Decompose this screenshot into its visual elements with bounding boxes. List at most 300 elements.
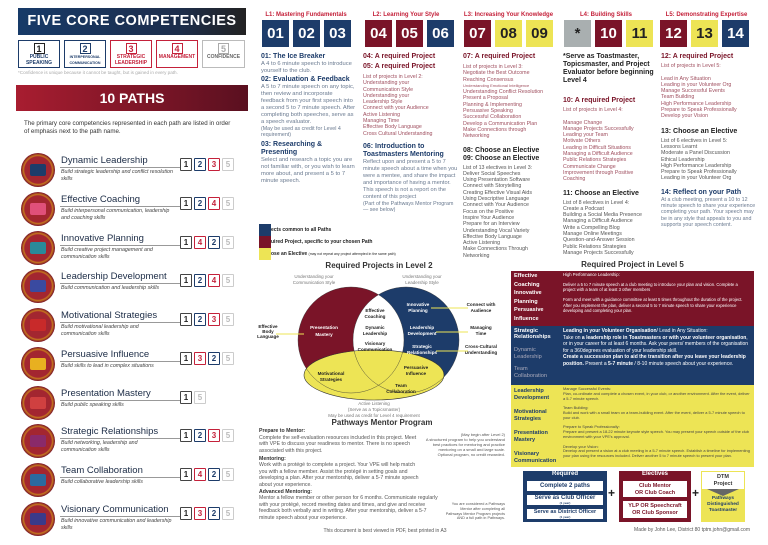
box: DTM: Pathways bbox=[712, 496, 734, 501]
box: electives: Electives bbox=[642, 471, 668, 477]
heading: required project in level 5: Required Project in Level 5 bbox=[581, 260, 684, 269]
mentor program: A structured program to help you understand best practices for mentoring and practice mentoring on a small and large scale. Optional program, no credit rewarded. bbox=[426, 437, 505, 457]
column: level 2: Cross Cultural Understanding bbox=[363, 131, 432, 137]
column: level 5: 13: Choose an Elective bbox=[661, 128, 737, 135]
path list: 1 bbox=[184, 160, 188, 169]
column: level 1: A 4 to 6 minute speech to introduce yourself to the club. bbox=[261, 61, 352, 74]
venn diagram: required projects in level 2: Cross-Cultural bbox=[465, 344, 497, 349]
column: level 3: Develop a Communication Plan bbox=[463, 121, 537, 127]
table: level 5: Persuasive bbox=[514, 307, 544, 313]
column: level 4: Create a Podcast bbox=[563, 206, 604, 212]
column: level 3: Effective Body Language bbox=[463, 234, 522, 240]
venn diagram: required projects in level 2: Visionary bbox=[365, 341, 386, 346]
column: level 3: Deliver Social Speeches bbox=[463, 171, 520, 177]
column: level 5: List of projects in Level 5: bbox=[661, 63, 721, 69]
column: level 5: Leading in your Volunteer Org bbox=[661, 82, 731, 88]
intro text: The primary core competencies represented in each path are listed in order of emphasis next to the path name. bbox=[24, 120, 230, 134]
column: level 3: Active Listening bbox=[463, 240, 500, 246]
table: level 5: Deliver a 5 to 7 minute speech at a club meeting to introduce your plan and vision. Complete a project with a team of at least 3 other members bbox=[563, 282, 738, 292]
path list: Build public speaking skills bbox=[61, 402, 124, 408]
column: level 1: 01: The Ice Breaker bbox=[261, 53, 325, 60]
level headers and number boxes: 07 bbox=[469, 25, 486, 42]
venn diagram: required projects in level 2: Team bbox=[395, 383, 407, 388]
column: level 4: Leading in Difficult Situations bbox=[563, 145, 631, 151]
column: level 3: Connect with Your Audience bbox=[463, 202, 529, 208]
column: level 3: Connect with Storytelling bbox=[463, 183, 521, 189]
path list: Leadership Development bbox=[61, 271, 167, 282]
box: required: Serve as Club Officer bbox=[535, 495, 595, 501]
column: level 2: 05: A required Project bbox=[363, 63, 435, 70]
text: Plan, co-ordinate and complete a chosen event, in your club, or another environment. After the event, deliver a 5-7 minute speech. bbox=[563, 391, 750, 401]
venn diagram: required projects in level 2: Dynamic bbox=[365, 325, 385, 330]
text: Strategic bbox=[514, 328, 538, 334]
column: level 1: 02: Evaluation & Feedback bbox=[261, 76, 350, 83]
column: level 5: Ethical Leadership bbox=[661, 157, 705, 163]
venn diagram: required projects in level 2: Leadership bbox=[363, 331, 387, 336]
column: level 5: High Performance Leadership bbox=[661, 163, 731, 169]
competency boxes: MANAGEMENT bbox=[159, 54, 195, 60]
competency boxes: 4 bbox=[174, 44, 180, 54]
level headers and number boxes: 14 bbox=[727, 25, 744, 42]
competency boxes: CONFIDENCE bbox=[207, 54, 240, 60]
column: level 2: (Part of the Pathways Mentor Program — see below) bbox=[363, 201, 453, 213]
box: DTM: Project bbox=[714, 480, 732, 486]
path list: 3 bbox=[212, 160, 216, 169]
column: level 5: Lessons Learnt bbox=[661, 144, 697, 150]
column: level 3: Planning & Implementing bbox=[463, 102, 522, 108]
column: level 2: Leadership Style bbox=[363, 99, 402, 105]
column: level 2: Effective Body Language bbox=[363, 124, 422, 130]
column: level 4: Leading your Team bbox=[563, 132, 608, 138]
venn diagram: required projects in level 2: Mastery bbox=[315, 332, 333, 337]
column: level 3: Successful Collaboration bbox=[463, 114, 521, 120]
column: level 3: Negotiate the Best Outcome bbox=[463, 70, 530, 76]
competency boxes: PUBLIC bbox=[30, 54, 48, 60]
column: level 2: Active Listening bbox=[363, 112, 400, 118]
text: Dynamic bbox=[514, 347, 536, 353]
venn diagram: required projects in level 2: Understanding your bbox=[294, 274, 334, 279]
path list: 3 bbox=[212, 315, 216, 324]
path list: Build motivational leadership and communication skills bbox=[61, 324, 139, 337]
venn diagram: required projects in level 2: Required Projects in Level 2 bbox=[325, 261, 433, 270]
venn diagram: required projects in level 2: (Serve as a Topicsmaster) bbox=[348, 407, 401, 412]
level headers and number boxes: * bbox=[575, 25, 580, 42]
column: level 3: Inspire Your Audience bbox=[463, 215, 514, 221]
column: level 2: Connect with your Audience bbox=[363, 105, 429, 111]
column: level 3: Make Connections through bbox=[463, 127, 526, 133]
level headers and number boxes: 05 bbox=[401, 25, 418, 42]
path list: Team Collaboration bbox=[61, 465, 143, 476]
text: Visionary bbox=[514, 451, 539, 457]
path list: 5 bbox=[226, 199, 230, 208]
box: required: (1 year) bbox=[560, 515, 570, 519]
path list: Build communication and leadership skills bbox=[61, 285, 159, 291]
column: level 5: Leading in your Volunteer Org bbox=[661, 175, 731, 181]
competency boxes: 3 bbox=[128, 44, 134, 54]
competency boxes: 5 bbox=[221, 44, 226, 54]
legend: ose an Elective (may not repeat any project attempted in the same path) bbox=[271, 251, 396, 257]
column: level 4: Managing a Difficult Audience bbox=[563, 218, 633, 224]
mentor program: You are considered a Pathways Mentor after completing all Pathways Mentor Program projects AND a full path in Pathways. bbox=[446, 502, 505, 520]
path list: 4 bbox=[198, 238, 202, 247]
column: level 1: A 5 to 7 minute speech on any topic, then review and incorporate feedback from your first speech into a second 5 to 7 minute speech. After completing both speeches, serve as a speech evaluator. bbox=[261, 84, 355, 125]
path list: 5 bbox=[226, 160, 230, 169]
column: level 2: Communication Style bbox=[363, 87, 413, 93]
level headers and number boxes: 09 bbox=[531, 25, 548, 42]
text: Develop your Vision: bbox=[563, 444, 599, 449]
competency boxes: INTERPERSONAL bbox=[70, 55, 100, 59]
column: level 4: Improvement through Positive bbox=[563, 170, 633, 176]
level headers and number boxes: L4: Building Skills bbox=[580, 12, 632, 18]
column: level 2: Managing Time bbox=[363, 118, 399, 124]
path list: Build innovative communication and leadership skills bbox=[61, 518, 171, 531]
column: level 3: Understanding Vocal Variety bbox=[463, 228, 529, 234]
legend: uired Project, specific to your chosen Path bbox=[271, 239, 372, 245]
mentor program bbox=[259, 418, 505, 521]
venn diagram: required projects in level 2: Effective bbox=[258, 324, 278, 329]
box: DTM bbox=[701, 471, 745, 522]
column: level 4: 11: Choose an Elective bbox=[563, 190, 639, 197]
path list: 1 bbox=[184, 354, 188, 363]
path list: 4 bbox=[212, 199, 216, 208]
level headers and number boxes: L1: Mastering Fundamentals bbox=[265, 12, 347, 18]
text: Team Building: bbox=[563, 405, 589, 410]
table: level 5: Innovative bbox=[514, 290, 542, 296]
venn diagram: required projects in level 2: Persuasive bbox=[404, 365, 429, 370]
legend bbox=[259, 224, 396, 260]
column: level 3: Persuasive Speaking bbox=[463, 108, 513, 114]
mentor program: Pathways Mentor Program bbox=[332, 418, 432, 427]
path list: 4 bbox=[198, 470, 202, 479]
path list: 2 bbox=[198, 315, 202, 324]
path list: 1 bbox=[184, 238, 188, 247]
path list: Strategic Relationships bbox=[61, 426, 158, 437]
text: Leadership bbox=[514, 388, 544, 394]
path list: Presentation Mastery bbox=[61, 388, 151, 399]
column: level 4: List of 8 electives in Level 4: bbox=[563, 200, 629, 206]
path list: 2 bbox=[198, 160, 202, 169]
path list: 5 bbox=[226, 238, 230, 247]
table: level 5: Effective bbox=[514, 273, 537, 279]
column: level 3: Understanding Emotional Intelligence bbox=[463, 83, 529, 88]
box: electives: OR Club Coach bbox=[635, 490, 675, 496]
path list: Visionary Communication bbox=[61, 504, 169, 515]
column: level 3 bbox=[463, 52, 543, 259]
competency boxes: LEADERSHIP bbox=[115, 60, 147, 66]
text: Team bbox=[514, 366, 528, 372]
path list: 1 bbox=[184, 509, 188, 518]
column: level 3: Make Connections Through bbox=[463, 246, 528, 252]
column: level 4 bbox=[563, 53, 654, 256]
column: level 5: Manage Successful Events bbox=[661, 88, 725, 94]
path list: Build creative project management and communication skills bbox=[61, 247, 153, 260]
path list: 5 bbox=[226, 315, 230, 324]
column: level 2 bbox=[363, 52, 457, 213]
column: level 4: Motivate Others bbox=[563, 138, 600, 144]
path list: Innovative Planning bbox=[61, 233, 144, 244]
path list: 3 bbox=[198, 509, 202, 518]
mentor program: (May begin after Level 2) bbox=[461, 432, 505, 437]
column: level 4: Building a Social Media Presence bbox=[563, 212, 642, 218]
venn diagram: required projects in level 2: Coaching bbox=[365, 314, 386, 319]
path list: Build interpersonal communication, leadership and coaching skills bbox=[61, 208, 169, 221]
level headers and number boxes: 04 bbox=[370, 25, 387, 42]
level headers and number boxes: 12 bbox=[665, 25, 682, 42]
title: five core competencies bbox=[18, 8, 246, 35]
mentor program: Advanced Mentoring: bbox=[259, 489, 312, 495]
venn diagram: required projects in level 2: Innovative bbox=[407, 302, 430, 307]
column: level 1: 03: Researching & Presenting bbox=[261, 141, 322, 156]
venn diagram: required projects in level 2: Time bbox=[476, 331, 487, 336]
path list: Persuasive Influence bbox=[61, 349, 149, 360]
column: level 4: Public Relations Strategies bbox=[563, 244, 626, 250]
column: level 5: Develop your Vision bbox=[661, 113, 708, 119]
box: electives: Club Mentor bbox=[639, 483, 671, 489]
column: level 4: Question-and-Answer Session bbox=[563, 237, 635, 243]
path list: 1 bbox=[184, 393, 188, 402]
column: level 5: Lead in Any Situation bbox=[661, 76, 711, 82]
mentor program: Work with a protégé to complete a project. Your VPE will help match you with a fellow member. Assist the protégé in setting goals and developing a plan. After your mentorship, deliver a 5-7 minute speech about your experience. bbox=[259, 462, 418, 488]
column: level 3: List of 13 electives in Level 3: bbox=[463, 165, 532, 171]
venn diagram: required projects in level 2: Body bbox=[262, 329, 274, 334]
column: level 4: Managing a Difficult Audience bbox=[563, 151, 633, 157]
competency boxes: STRATEGIC bbox=[117, 54, 145, 60]
venn diagram: required projects in level 2: May be used as credit for Level 4 requirement bbox=[328, 413, 421, 418]
venn diagram: required projects in level 2: Influence bbox=[406, 371, 427, 376]
column: level 4: Manage Projects Successfully bbox=[563, 126, 634, 132]
venn diagram: required projects in level 2: Language bbox=[257, 334, 279, 339]
column: level 1: Select and research a topic you are not familiar with, or you wish to learn more about, and present a 5 to 7 minute speech. bbox=[261, 157, 355, 184]
venn diagram: required projects in level 2: Connect with bbox=[467, 302, 496, 307]
path list: 1 bbox=[184, 276, 188, 285]
competency boxes: *Confidence is unique because it cannot be taught, but is gained in every path. bbox=[18, 70, 178, 75]
column: level 3: 07: A required Project bbox=[463, 53, 535, 60]
text: Communication bbox=[514, 458, 556, 464]
path list: Motivational Strategies bbox=[61, 310, 157, 321]
box: DTM: Toastmaster bbox=[709, 508, 737, 513]
heading: 10 paths bbox=[16, 85, 248, 111]
mentor program: Mentor a fellow member or other person for 6 months. Communicate regularly with your protégé, record meeting dates and times, and give and receive feedback both verbally and in writing. After your mentorship, deliver a 5-7 minute speech about your experience. bbox=[259, 495, 438, 521]
level headers and number boxes bbox=[262, 12, 749, 47]
path list: 4 bbox=[212, 276, 216, 285]
venn diagram: required projects in level 2: Effective bbox=[365, 308, 385, 313]
table: level 5: Coaching bbox=[514, 282, 539, 288]
column: level 4: Manage Change bbox=[563, 120, 602, 126]
competency boxes bbox=[18, 40, 245, 75]
path list: 1 bbox=[184, 431, 188, 440]
venn diagram: required projects in level 2: Development bbox=[408, 331, 437, 336]
column: level 5: At a club meeting, present a 10 to 12 minute speech to share your experience completing your path. Your speech may be in any style that appeals to you and supports your speech content. bbox=[661, 197, 755, 228]
box: required: Complete 2 paths bbox=[540, 483, 590, 489]
competency boxes: SPEAKING bbox=[26, 60, 52, 66]
column: level 3: Networking bbox=[463, 133, 490, 139]
level headers and number boxes: 08 bbox=[500, 25, 517, 42]
column: level 4: Communicate Change bbox=[563, 164, 616, 170]
table: level 5: Influence bbox=[514, 316, 539, 322]
box: electives bbox=[619, 471, 691, 522]
text: Build and work with a small team on a team-building event. After the event, deliver a 5-7 minute speech to your club. bbox=[563, 410, 745, 420]
column: level 5: Team Building bbox=[661, 94, 694, 100]
venn diagram: required projects in level 2 bbox=[257, 261, 497, 418]
text: Leadership bbox=[514, 354, 542, 360]
venn diagram: required projects in level 2: Relationships bbox=[407, 350, 438, 355]
venn diagram: required projects in level 2: Presentation bbox=[310, 325, 338, 330]
mentor program: Complete the self-evaluation resources included in this project. Meet with VPE to discuss your readiness to mentor. There is no speech associated with this project. bbox=[259, 435, 416, 454]
text: Take on a leadership role in Toastmasters or with your volunteer organisation, or in your career for at least 6 months. Ask your peers/ members of the organisation for a 360degrees evaluation of your leadership skill. bbox=[563, 335, 748, 354]
text: Prepare to Speak Professionally: bbox=[563, 424, 620, 429]
column: level 1 bbox=[261, 52, 355, 184]
column: level 5 bbox=[661, 52, 755, 228]
path list: 5 bbox=[226, 509, 230, 518]
column: level 4: *Serve as Toastmaster, Topicsmaster, and Project Evaluator before beginning Level 4 bbox=[563, 53, 654, 84]
box: required: Required bbox=[552, 471, 578, 477]
column: level 3: Using Presentation Software bbox=[463, 177, 530, 183]
path list: 2 bbox=[212, 238, 216, 247]
column: level 4: List of projects in Level 4: bbox=[563, 107, 623, 113]
level headers and number boxes: L5: Demonstrating Expertise bbox=[666, 12, 747, 18]
column: level 2: Understanding your bbox=[363, 93, 409, 99]
column: level 5: 14: Reflect on your Path bbox=[661, 189, 741, 196]
path list: Dynamic Leadership bbox=[61, 155, 148, 166]
venn diagram: required projects in level 2: Managing bbox=[470, 325, 492, 330]
path list: 1 bbox=[184, 199, 188, 208]
competency boxes: COMMUNICATION bbox=[69, 60, 101, 64]
column: level 3: Present a Proposal bbox=[463, 95, 508, 101]
path list: Effective Coaching bbox=[61, 194, 140, 205]
path list: 5 bbox=[226, 431, 230, 440]
level headers and number boxes: 03 bbox=[329, 25, 346, 42]
venn diagram: required projects in level 2: Communication Style bbox=[293, 280, 336, 285]
column: level 2: Reflect upon and present a 5 to 7 minute speech about a time when you were a mentee, and share the impact and importance of having a mentor. This speech is not a report on the content of this project bbox=[363, 159, 457, 200]
path list: 2 bbox=[198, 199, 202, 208]
column: level 4: Manage Projects Successfully bbox=[563, 250, 634, 256]
column: level 3: Reaching Consensus bbox=[463, 77, 513, 83]
text: Create a succession plan to aid the transition after you leave your leadership position. Present a 5-7 minute / 8-10 minute speech about your experience. bbox=[563, 354, 746, 367]
column: level 1: (May be used as credit for Level 4 requirement) bbox=[261, 126, 341, 138]
level headers and number boxes: 11 bbox=[632, 25, 647, 42]
box: DTM: DTM bbox=[717, 474, 729, 480]
box: DTM: Distinguished bbox=[707, 502, 739, 507]
column: level 3: List of projects in Level 3: bbox=[463, 64, 523, 70]
text: Leading in your Volunteer Organisation/ Lead in Any Situation: bbox=[563, 328, 708, 334]
box: electives: YLP OR Speechcraft bbox=[628, 503, 682, 509]
column: level 4: Manage Online Meetings bbox=[563, 231, 622, 237]
path list: 5 bbox=[226, 276, 230, 285]
table: level 5: Form and meet with a guidance committee at least 5 times throughout the duration of the project. After you implement the plan, deliver a second 5 to 7 minute speech to share your experience developing and completing your plan. bbox=[563, 297, 742, 313]
path list: 2 bbox=[198, 276, 202, 285]
column: level 3: Focus on the Positive bbox=[463, 209, 514, 215]
column: level 4: Public Relations Strategies bbox=[563, 157, 626, 163]
mentor program: Prepare to Mentor: bbox=[259, 428, 305, 434]
venn diagram: required projects in level 2: Motivational bbox=[318, 371, 344, 376]
venn diagram: required projects in level 2: Leadership Style bbox=[405, 280, 439, 285]
column: level 5: High Performance Leadership bbox=[661, 101, 731, 107]
column: level 3: Understanding Conflict Resolution bbox=[463, 89, 543, 95]
text: Motivational bbox=[514, 409, 547, 415]
venn diagram: required projects in level 2: Collaboration bbox=[386, 389, 416, 394]
text: Develop and present a vision at a club meeting in a 5-7 minute speech. Establish a timeline for implementing your plan using the resources included. Deliver another 5 to 7 minute speech to present your plan. bbox=[563, 448, 750, 458]
path list: 2 bbox=[212, 509, 216, 518]
path list: 2 bbox=[198, 431, 202, 440]
path list: 2 bbox=[212, 354, 216, 363]
path list: 5 bbox=[198, 393, 202, 402]
venn diagram: required projects in level 2: Strategic bbox=[412, 344, 432, 349]
text: Manage Successful Events: bbox=[563, 386, 611, 391]
level headers and number boxes: 01 bbox=[267, 25, 284, 42]
column: level 4: Coaching bbox=[563, 176, 585, 182]
text: Mastery bbox=[514, 437, 535, 443]
table: level 5: Planning bbox=[514, 299, 538, 305]
column: level 3: Prepare for an Interview bbox=[463, 221, 520, 227]
path list: 2 bbox=[212, 470, 216, 479]
venn diagram: required projects in level 2: Audience bbox=[471, 308, 492, 313]
level headers and number boxes: L2: Learning Your Style bbox=[373, 12, 439, 18]
table: level 5 bbox=[511, 271, 754, 326]
level headers and number boxes: 13 bbox=[696, 25, 713, 42]
path list: Build skills to lead in complex situations bbox=[61, 363, 154, 369]
box: required: (1 year) bbox=[560, 501, 570, 505]
plus: + bbox=[692, 486, 699, 500]
path list: 3 bbox=[212, 431, 216, 440]
path list: 1 bbox=[184, 315, 188, 324]
venn diagram: required projects in level 2: Understanding bbox=[465, 350, 497, 355]
column: level 2: 04: A required Project bbox=[363, 53, 435, 60]
path list: Build collaborative leadership skills bbox=[61, 479, 143, 485]
column: level 3: Creating Effective Visual Aids bbox=[463, 190, 532, 196]
column: level 5: Prepare to Speak Professionally bbox=[661, 107, 737, 113]
title: five core competencies: FIVE CORE COMPETENCIES bbox=[27, 13, 237, 29]
venn diagram: required projects in level 2: Active Listening bbox=[358, 401, 390, 406]
text: Presentation bbox=[514, 430, 548, 436]
level headers and number boxes: 02 bbox=[298, 25, 315, 42]
path list: 5 bbox=[226, 354, 230, 363]
column: level 5: 12: A required Project bbox=[661, 53, 733, 60]
footer note: This document is best viewed in PDF, best printed in A3 bbox=[323, 528, 447, 534]
column: level 5: Prepare to Speak Professionally bbox=[661, 169, 737, 175]
text: Development bbox=[514, 395, 549, 401]
column: level 4: 10: A required Project bbox=[563, 97, 635, 104]
legend: ects common to all Paths bbox=[271, 227, 331, 233]
heading: 10 paths: 10 PATHS bbox=[100, 90, 164, 106]
box: electives: OR Club Sponsor bbox=[632, 510, 678, 516]
text: Relationships bbox=[514, 334, 551, 340]
text: Strategies bbox=[514, 416, 541, 422]
column: level 3: Networking bbox=[463, 253, 490, 259]
venn diagram: required projects in level 2: Planning bbox=[408, 308, 428, 313]
column: level 5: List of 6 electives in Level 5: bbox=[661, 138, 727, 144]
column: level 3: 09: Choose an Elective bbox=[463, 155, 539, 162]
venn diagram: required projects in level 2: Strategies bbox=[320, 377, 343, 382]
level headers and number boxes: 10 bbox=[600, 25, 617, 42]
path list bbox=[21, 153, 234, 536]
text: Prepare and present a 18-22 minute keynote style speech. You may present your speech outside of the club environment with your VPE's approval. bbox=[563, 429, 749, 439]
column: level 3: 08: Choose an Elective bbox=[463, 147, 539, 154]
competency boxes: 1 bbox=[36, 44, 42, 54]
path list: Build strategic leadership and conflict resolution skills bbox=[61, 169, 173, 182]
competency boxes: 2 bbox=[82, 44, 88, 54]
column: level 2: Understanding your bbox=[363, 80, 409, 86]
box: required: Serve as District Officer bbox=[534, 509, 596, 515]
plus: + bbox=[608, 486, 615, 500]
table: level 5: High Performance Leadership: bbox=[563, 272, 620, 277]
box: required bbox=[523, 471, 607, 522]
credit: Made by John Lee, District 80 tptm.john@gmail.com bbox=[634, 527, 750, 533]
venn diagram: required projects in level 2: Leadership bbox=[410, 325, 434, 330]
path list: 3 bbox=[198, 354, 202, 363]
column: level 3: Using Descriptive Language bbox=[463, 196, 529, 202]
venn diagram: required projects in level 2: Understanding your bbox=[402, 274, 442, 279]
path list: 5 bbox=[226, 470, 230, 479]
